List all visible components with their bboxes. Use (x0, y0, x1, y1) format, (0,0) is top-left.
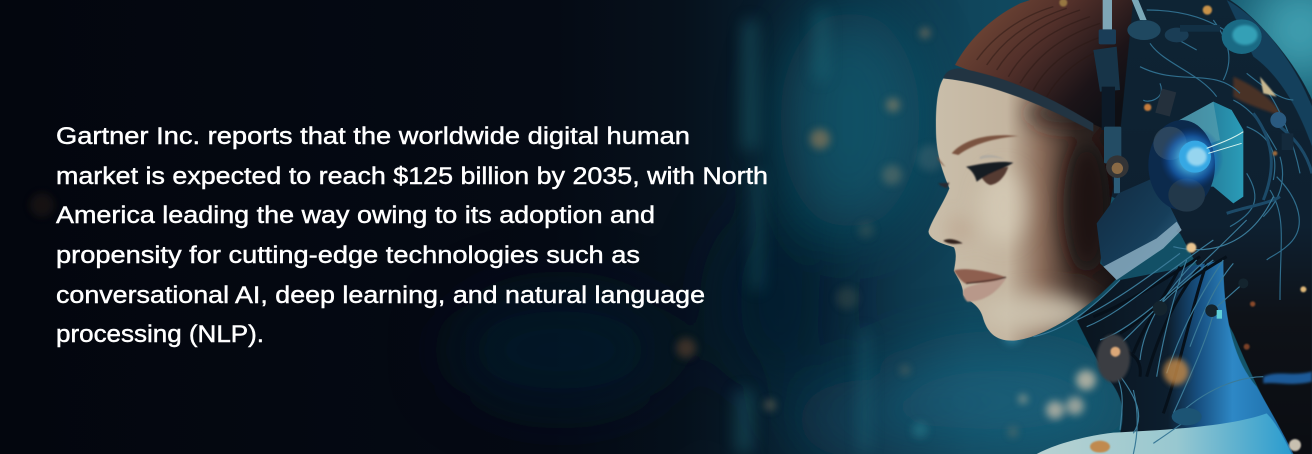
glowing orb (1160, 127, 1243, 190)
face (928, 78, 1117, 341)
eyebrow (937, 135, 1018, 167)
head-top discs (1127, 19, 1262, 117)
portrait: woman with cybernetic headset (928, 0, 1312, 454)
headband (943, 68, 1093, 132)
shoulder (1037, 413, 1292, 454)
body text: propensity for cutting-edge technologies such as (56, 242, 640, 269)
cable bundle on neck (1093, 257, 1227, 413)
headset arm (1093, 0, 1147, 193)
bokeh lights (30, 28, 1096, 438)
body text: Gartner Inc. reports that the worldwide digital human (56, 123, 690, 150)
body text: conversational AI, deep learning, and natural language (56, 282, 705, 309)
body text (56, 123, 768, 348)
throat module (1097, 334, 1130, 382)
body text: America leading the way owing to its adoption and (56, 202, 655, 229)
hair brown (955, 0, 1133, 133)
orb socket (1148, 120, 1215, 212)
wires behind ear (1140, 10, 1300, 300)
earcup upper (1167, 102, 1243, 203)
body text: processing (NLP). (56, 321, 264, 348)
neck (1077, 260, 1293, 454)
eye (938, 155, 1013, 188)
neck nodes (1153, 112, 1293, 425)
orange sparks (1059, 0, 1306, 453)
hair strands (977, 7, 1110, 97)
lips (954, 269, 1006, 302)
long dark hair (1093, 0, 1312, 454)
body text: market is expected to reach $125 billion by 2035, with North (56, 163, 768, 190)
nose shadow (943, 239, 963, 244)
earcup lower (1097, 177, 1180, 280)
